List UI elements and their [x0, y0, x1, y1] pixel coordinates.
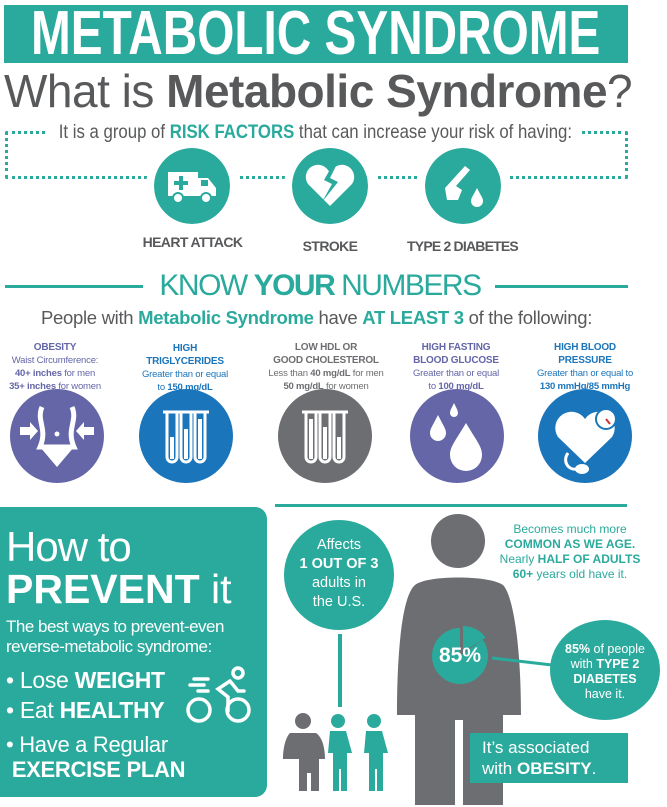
callout: associated with obesity	[470, 733, 628, 783]
column: blood pressure	[537, 342, 633, 392]
column: obesity: 35+ inches for women	[9, 381, 101, 392]
subtitle: What is Metabolic Syndrome?	[4, 65, 632, 117]
column: glucose: HIGH FASTING	[422, 342, 490, 353]
column: obesity: Waist Circumference:	[12, 355, 98, 366]
icon: test tubes blue	[139, 389, 233, 483]
risk icons: STROKE	[303, 238, 357, 254]
callout: 85% of type 2 diabetics: with TYPE 2	[571, 657, 639, 671]
column: blood pressure: HIGH BLOOD	[554, 342, 616, 353]
callout: 85% of type 2 diabetics: 85% of people	[565, 642, 645, 656]
callout: 1 out of 3: Affects	[317, 537, 361, 553]
section heading: know your numbers: KNOW YOUR NUMBERS	[159, 269, 481, 302]
callout: 85% of type 2 diabetics: have it.	[585, 687, 625, 701]
column: triglycerides: to 150 mg/dL	[157, 382, 213, 393]
column: hdl: Less than 40 mg/dL for men	[268, 368, 384, 379]
column: glucose: Greater than or equal	[413, 368, 499, 379]
pie chart 85%	[432, 626, 488, 684]
icon: heart attack ambulance	[154, 148, 230, 224]
labels: HEART ATTACK	[143, 234, 242, 250]
callout: age: Becomes much more	[513, 522, 627, 536]
column: hdl	[268, 342, 384, 392]
callout: 1 out of 3: the U.S.	[313, 594, 365, 610]
risk icons	[143, 148, 518, 254]
column: obesity: 40+ inches for men	[15, 368, 95, 379]
column: hdl: GOOD CHOLESTEROL	[273, 355, 379, 366]
callout: 85% of type 2 diabetics: DIABETES	[573, 672, 637, 686]
pie chart 85%: 85%	[439, 644, 481, 667]
column: triglycerides	[142, 343, 228, 393]
icon: three people	[283, 713, 388, 791]
callout: age: Nearly HALF OF ADULTS	[500, 552, 640, 566]
panel: how to prevent: • Eat HEALTHY	[6, 697, 164, 723]
panel: how to prevent: How to	[6, 523, 131, 570]
callout: age	[500, 522, 640, 581]
intro text: It is a group of RISK FACTORS that can increase your risk of having:	[58, 121, 572, 143]
icon: waist	[10, 389, 104, 483]
column: glucose: BLOOD GLUCOSE	[413, 355, 499, 366]
icon: drops	[410, 389, 504, 483]
panel: how to prevent	[0, 507, 267, 797]
callout: associated with obesity: with OBESITY.	[482, 759, 596, 778]
icon: heart pressure	[538, 389, 632, 483]
column: triglycerides: HIGH	[173, 343, 197, 354]
column: blood pressure: 130 mmHg/85 mmHg	[540, 381, 630, 392]
callout: age: 60+ years old have it.	[513, 567, 627, 581]
connector to diabetes callout	[492, 656, 550, 666]
column: glucose	[413, 342, 499, 392]
section heading: know your numbers	[5, 269, 628, 302]
icon: cyclist	[186, 666, 251, 723]
panel: how to prevent: reverse-metabolic syndrome:	[6, 637, 212, 656]
column: triglycerides: Greater than or equal	[142, 369, 228, 380]
panel: how to prevent: PREVENT it	[6, 566, 232, 612]
column: hdl: 50 mg/dL for women	[283, 381, 369, 392]
panel: how to prevent: EXERCISE PLAN	[12, 757, 185, 782]
callout: age: COMMON AS WE AGE.	[505, 537, 635, 551]
connector line	[338, 634, 342, 707]
column: triglycerides: TRIGLYCERIDES	[146, 356, 224, 367]
icon: diabetes finger drop	[425, 148, 501, 224]
divider	[275, 504, 627, 507]
column: glucose: to 100 mg/dL	[428, 381, 484, 392]
panel: how to prevent: • Lose WEIGHT	[6, 667, 165, 693]
column: blood pressure: PRESSURE	[558, 355, 612, 366]
icon: test tubes grey	[278, 389, 372, 483]
callout: 85% of type 2 diabetics	[550, 620, 660, 720]
callout: 1 out of 3: adults in	[312, 575, 366, 591]
column: hdl: LOW HDL OR	[295, 342, 357, 353]
column: blood pressure: Greater than or equal to	[537, 368, 633, 379]
dotted frame	[5, 131, 628, 179]
icon: stroke broken heart	[292, 148, 368, 224]
risk icons: TYPE 2 DIABETES	[407, 238, 518, 254]
column: obesity: OBESITY	[34, 342, 76, 353]
column: obesity	[9, 342, 101, 392]
callout: 1 out of 3	[284, 520, 394, 630]
callout: associated with obesity: It’s associated	[482, 738, 589, 757]
panel: how to prevent: The best ways to prevent-even	[6, 617, 224, 636]
big person figure	[396, 514, 521, 805]
callout: 1 out of 3: 1 OUT OF 3	[300, 556, 378, 572]
criteria sentence: People with Metabolic Syndrome have AT LEAST 3 of the following:	[41, 307, 592, 328]
panel: how to prevent: • Have a Regular	[6, 732, 168, 757]
